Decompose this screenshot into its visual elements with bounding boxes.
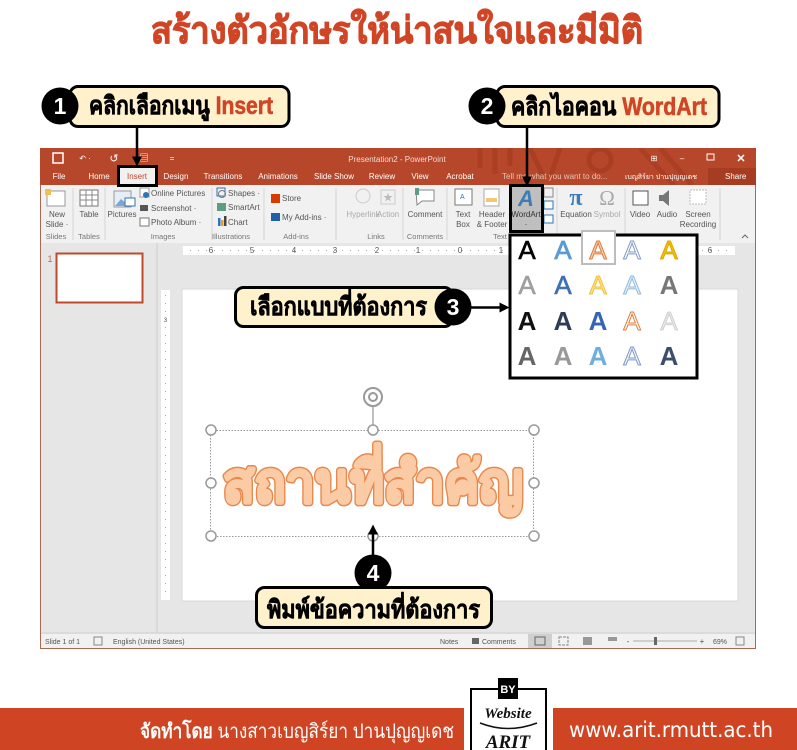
ruler — [161, 246, 735, 600]
title bar and tab row: ▤ — [139, 153, 149, 163]
ribbon: Store — [282, 194, 302, 203]
WordArt gallery: A — [623, 270, 641, 300]
highlight: WordArt button: WordArt — [511, 210, 541, 219]
callout 1 — [42, 86, 289, 126]
ribbon icons — [45, 185, 706, 226]
slide thumbnail: 1 — [47, 254, 53, 264]
WordArt gallery: A — [623, 341, 641, 371]
WordArt gallery: A — [518, 235, 536, 265]
callout 3 — [236, 288, 472, 326]
logo badge: BY — [500, 684, 516, 696]
ribbon: Online Pictures — [151, 189, 205, 198]
callout 1: 1 — [54, 93, 67, 119]
ribbon: Hyperlink — [346, 210, 381, 219]
callout 3: 3 — [447, 294, 459, 320]
title bar and tab row: Review — [369, 172, 395, 181]
title bar and tab row: – — [680, 154, 685, 163]
callout 4: 4 — [367, 560, 380, 586]
ribbon: Screenshot · — [151, 204, 196, 213]
ruler: 6 — [708, 246, 713, 255]
highlight: Insert tab — [118, 166, 156, 186]
title bar and tab row: เบญสิร์ยา ปานปุญญเดช — [625, 173, 697, 181]
ruler: 4 — [292, 246, 297, 255]
ribbon: Action — [377, 210, 399, 219]
title bar and tab row: Share — [725, 172, 747, 181]
status bar — [41, 633, 755, 648]
highlight: WordArt button — [510, 186, 542, 232]
title bar and tab row: Acrobat — [446, 172, 475, 181]
ribbon: Illustrations — [212, 232, 250, 241]
WordArt gallery: A — [589, 235, 607, 265]
ruler: 5 — [250, 246, 255, 255]
ribbon: Screen — [685, 210, 711, 219]
status bar: - — [627, 637, 630, 646]
WordArt text with selection box — [206, 388, 539, 541]
title bar and tab row: = — [170, 154, 175, 163]
status bar: 69% — [713, 639, 727, 646]
arrow: step 1 to Insert — [136, 126, 138, 163]
arrow: step 2 to WordArt — [526, 126, 528, 183]
ruler: 6 — [209, 246, 214, 255]
status bar: Slide 1 of 1 — [45, 639, 80, 646]
ruler: 1 — [499, 246, 504, 255]
logo badge: Website — [484, 706, 532, 722]
title bar and tab row: Transitions — [204, 172, 242, 181]
WordArt gallery: A — [554, 341, 573, 371]
title bar and tab row: Tell me what you want to do... — [502, 172, 607, 181]
ribbon: Photo Album · — [151, 218, 201, 227]
status bar: Comments — [482, 639, 516, 646]
callout 2 — [468, 86, 719, 126]
title bar and tab row: View — [411, 172, 429, 181]
title bar and tab row: ↶ · — [79, 154, 91, 163]
arrow: step 4 to text box — [372, 528, 374, 556]
WordArt gallery: A — [589, 270, 607, 300]
footer bar right with URL: www.arit.rmutt.ac.th — [569, 718, 773, 742]
title bar and tab row: Slide Show — [314, 172, 354, 181]
callout 2: คลิกไอคอน WordArt — [511, 91, 708, 121]
ribbon: Chart — [228, 218, 248, 227]
status bar: Notes — [440, 639, 459, 646]
ribbon: Slide · — [46, 220, 68, 229]
title bar and tab row: File — [53, 172, 66, 181]
title bar and tab row: Home — [88, 172, 110, 181]
title bar and tab row: Design — [164, 172, 188, 181]
WordArt gallery: A — [660, 235, 678, 265]
title bar and tab row: Animations — [258, 172, 298, 181]
ribbon: Recording — [680, 220, 716, 229]
ribbon: Slides — [46, 232, 66, 241]
ruler: 0 — [458, 246, 463, 255]
ribbon: Text — [493, 232, 508, 241]
ribbon: Box — [456, 220, 470, 229]
highlight: WordArt button: A — [517, 186, 534, 211]
WordArt gallery: A — [623, 306, 641, 336]
WordArt gallery: A — [589, 306, 608, 336]
ruler: 1 — [416, 246, 421, 255]
WordArt gallery: A — [554, 306, 573, 336]
callout 3: เลือกแบบที่ต้องการ — [250, 289, 427, 321]
ribbon: Symbol — [594, 210, 621, 219]
title bar and tab row: ✕ — [736, 153, 746, 165]
ribbon: Links — [367, 232, 385, 241]
callout 4: พิมพ์ข้อความที่ต้องการ — [267, 592, 480, 624]
status bar: English (United States) — [113, 639, 185, 646]
title bar and tab row — [40, 148, 756, 185]
title bar and tab row: ↺ — [109, 153, 119, 165]
ribbon: & Footer — [477, 220, 508, 229]
ribbon — [41, 185, 755, 243]
ribbon: Pictures — [108, 210, 136, 219]
ribbon icons: Ω — [599, 186, 615, 210]
slide thumbnail — [47, 254, 142, 302]
ribbon: Comments — [407, 232, 443, 241]
slide canvas — [182, 289, 738, 601]
WordArt gallery: A — [589, 341, 608, 371]
ribbon: Text — [456, 210, 471, 219]
title bar and tab row: Presentation2 - PowerPoint — [348, 155, 446, 164]
WordArt text with selection box: สถานที่สำคัญ — [223, 443, 523, 516]
icon: rotate handle — [364, 388, 382, 406]
callout 4 — [256, 554, 492, 628]
title: สร้างตัวอักษรให้น่าสนใจและมีมิติ — [151, 8, 643, 51]
footer bar left: จัดทำโดย นางสาวเบญสิร์ยา ปานปุญญเดช — [140, 719, 454, 744]
WordArt gallery — [510, 231, 697, 378]
WordArt gallery: A — [554, 270, 572, 300]
ribbon icons: ★ — [383, 193, 393, 204]
WordArt gallery: A — [554, 235, 572, 265]
arrow: step 3 to gallery — [470, 306, 506, 309]
ribbon: Table — [79, 210, 99, 219]
footer bar left — [0, 708, 464, 750]
ribbon: Add-ins — [283, 232, 309, 241]
ribbon: Tables — [78, 232, 100, 241]
ruler: 2 — [375, 246, 380, 255]
callout 2: 2 — [481, 93, 493, 119]
ribbon: My Add-ins · — [282, 213, 326, 222]
WordArt gallery: A — [623, 235, 641, 265]
ruler: 3 — [164, 318, 168, 324]
footer bar right with URL — [553, 708, 797, 750]
WordArt text with selection box: สถานที่สำคัญ — [223, 443, 523, 516]
ribbon: SmartArt — [228, 203, 260, 212]
ribbon: Audio — [657, 210, 678, 219]
ribbon: New — [49, 210, 65, 219]
ribbon icons: π — [569, 185, 583, 211]
WordArt gallery: A — [660, 306, 678, 336]
ribbon: Comment — [408, 210, 443, 219]
WordArt gallery: A — [660, 341, 679, 371]
status bar: + — [700, 637, 705, 646]
ribbon icons: A — [460, 194, 465, 201]
title bar and tab row: ⊞ — [651, 154, 657, 163]
WordArt gallery: A — [518, 341, 537, 371]
WordArt gallery: A — [660, 270, 679, 300]
ribbon: Images — [151, 232, 176, 241]
ribbon: Shapes · — [228, 189, 260, 198]
WordArt gallery: A — [518, 270, 536, 300]
panel: PowerPoint window — [40, 148, 756, 648]
ribbon: Equation — [560, 210, 592, 219]
highlight: WordArt button: · — [525, 220, 527, 229]
ruler: 3 — [333, 246, 338, 255]
callout 1: คลิกเลือกเมนู Insert — [89, 92, 274, 122]
ribbon: Video — [630, 210, 651, 219]
ribbon: Header — [479, 210, 505, 219]
logo badge — [471, 678, 546, 750]
title bar and tab row: Insert — [127, 172, 148, 181]
WordArt gallery: A — [518, 306, 537, 336]
